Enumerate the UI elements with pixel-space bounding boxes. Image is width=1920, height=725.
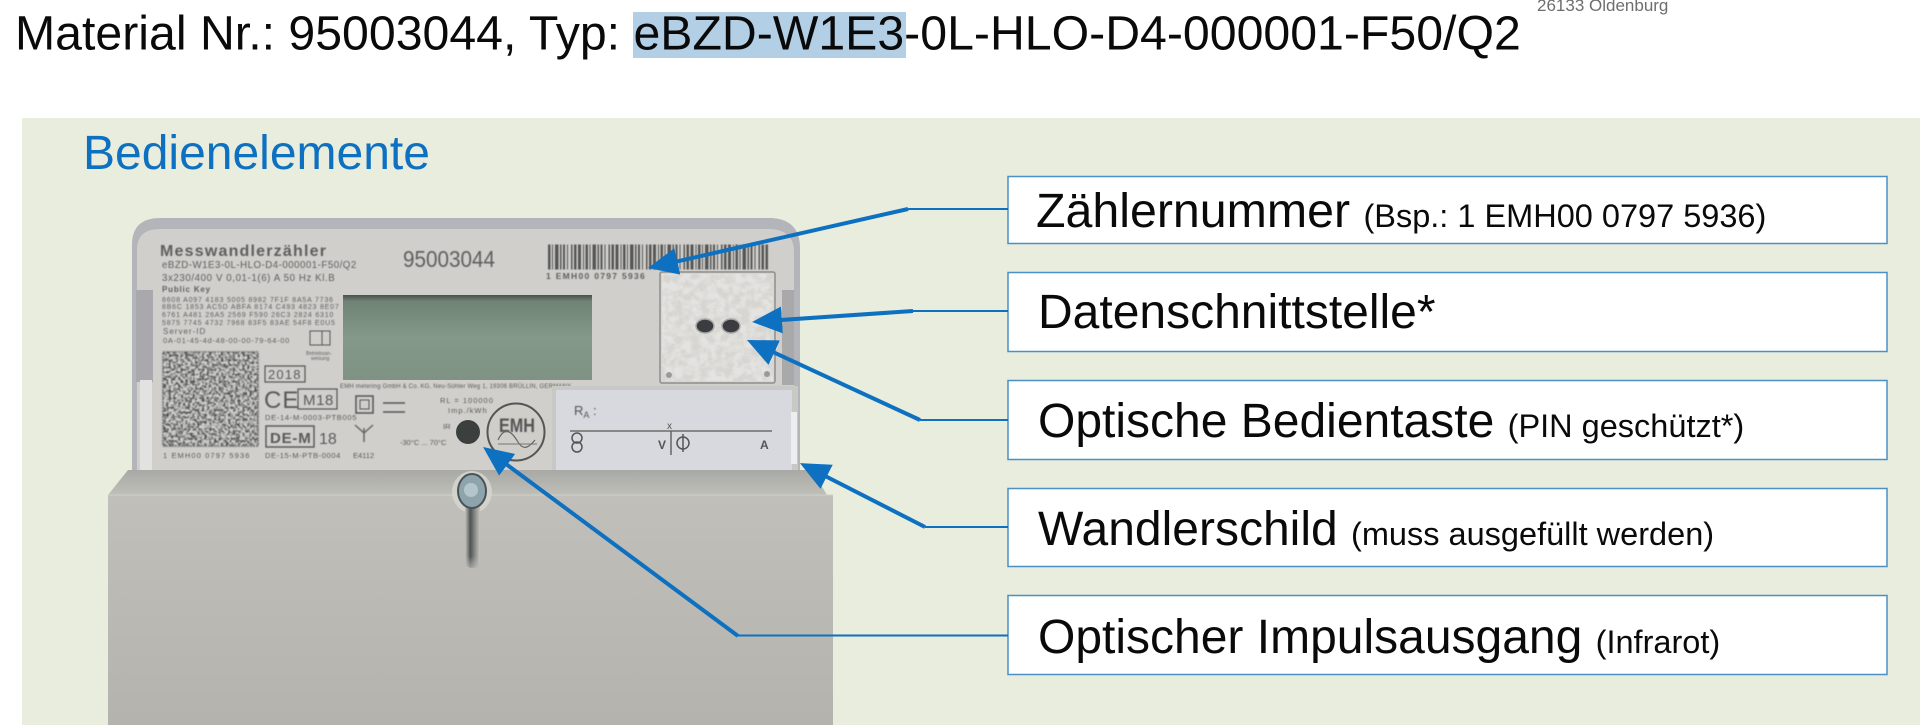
conformity marks: M18 (303, 392, 334, 409)
meter rating label: 6761 A481 26A5 2569 F590 26C3 2824 6310 (162, 312, 334, 319)
QR code (163, 352, 258, 446)
callout: Datenschnittstelle (1008, 272, 1887, 352)
display (343, 295, 592, 380)
arrow: Wandlerschild (812, 470, 1008, 527)
conformity marks: DE-15-M-PTB-0004 (265, 451, 341, 460)
title: Material Nr.: 95003044, Typ: eBZD-W1E3-0L-HLO-D4-000001-F50/Q2 (15, 6, 1521, 60)
Wandlerschild label: R (574, 403, 583, 418)
meter rating label (160, 243, 357, 362)
conformity marks: 18 (319, 431, 337, 448)
meter rating label: 3x230/400 V 0,01-1(6) A 50 Hz Kl.B (162, 273, 335, 284)
meter photo (108, 218, 833, 725)
conformity marks: DE-M (270, 430, 312, 447)
conformity marks: 2018 (268, 367, 302, 382)
meter rating label: 0A-01-45-4d-48-00-00-79-64-00 (163, 336, 290, 345)
callout: Wandlerschild: Wandlerschild (muss ausgefüllt werden) (1038, 503, 1714, 556)
Wandlerschild label: x (667, 421, 672, 432)
arrow: Datenschnittstelle (766, 311, 1008, 321)
conformity marks: Imp./kWh (448, 406, 488, 415)
callout: Datenschnittstelle: Datenschnittstelle* (1038, 286, 1436, 339)
meter lower cover (108, 470, 833, 725)
EMH logo and IR port (456, 404, 544, 460)
arrow: Optischer Impulsausgang (494, 455, 1008, 636)
callout: Optischer Impulsausgang (1008, 596, 1887, 674)
EMH logo and IR port: EMH (499, 416, 535, 437)
meter rating label: eBZD-W1E3-0L-HLO-D4-000001-F50/Q2 (162, 260, 357, 271)
conformity marks (163, 366, 571, 460)
panel heading: Bedienelemente (83, 127, 430, 180)
metal plate (660, 272, 775, 383)
arrow: Zählernummer (662, 209, 1008, 265)
conformity marks: IR (443, 422, 451, 431)
Wandlerschild label: A (760, 438, 769, 452)
callout: Zählernummer: Zählernummer (Bsp.: 1 EMH00 0797 5936) (1036, 184, 1766, 238)
meter rating label: weisung (311, 356, 330, 362)
meter rating label: Messwandlerzähler (160, 243, 327, 260)
callout: Optische Bedientaste (1008, 380, 1887, 460)
Wandlerschild label: V (658, 438, 666, 452)
barcode: 1 EMH00 0797 5936 (546, 271, 646, 281)
callout: Wandlerschild (1008, 488, 1887, 566)
conformity marks: DE-14-M-0003-PTB005 (265, 413, 357, 422)
meter rating label: 8B6C 1853 AC5D ABFA 8174 C493 4823 8E07 (162, 304, 340, 311)
meter rating label: 5875 7745 4732 7968 83F5 83AE 54F8 E0U5 (162, 320, 336, 327)
conformity marks: E4112 (353, 451, 374, 460)
conformity marks: EMH metering GmbH & Co. KG, Neu-Sühler Weg 1, 19306 BRÜLLIN, GERMANY (340, 383, 571, 390)
meter housing (132, 218, 800, 480)
conformity marks: 1 EMH00 0797 5936 (163, 451, 250, 460)
conformity marks: -30°C ... 70°C (400, 438, 447, 447)
meter rating label: Betriebsan- (306, 351, 332, 357)
meter rating label: 8608 A097 4183 5005 8982 7F1F 8A5A 7736 (162, 297, 334, 304)
arrow: Optische Bedientaste (760, 346, 1008, 420)
sealing screw (452, 471, 492, 568)
meter rating label: Server-ID (163, 327, 206, 336)
conformity marks: RL = 100000 (440, 396, 494, 405)
Wandlerschild label: A (583, 410, 589, 420)
callout: Optische Bedientaste: Optische Bedientaste (PIN geschützt*) (1038, 395, 1744, 448)
meter rating label: Public Key (162, 285, 211, 294)
callout: Zählernummer (1008, 176, 1887, 244)
Wandlerschild label (552, 386, 798, 472)
conformity marks: CE (264, 387, 299, 414)
callout: Optischer Impulsausgang: Optischer Impulsausgang (Infrarot) (1038, 611, 1720, 664)
material number: 95003044 (403, 246, 495, 272)
Wandlerschild label: : (589, 403, 597, 418)
